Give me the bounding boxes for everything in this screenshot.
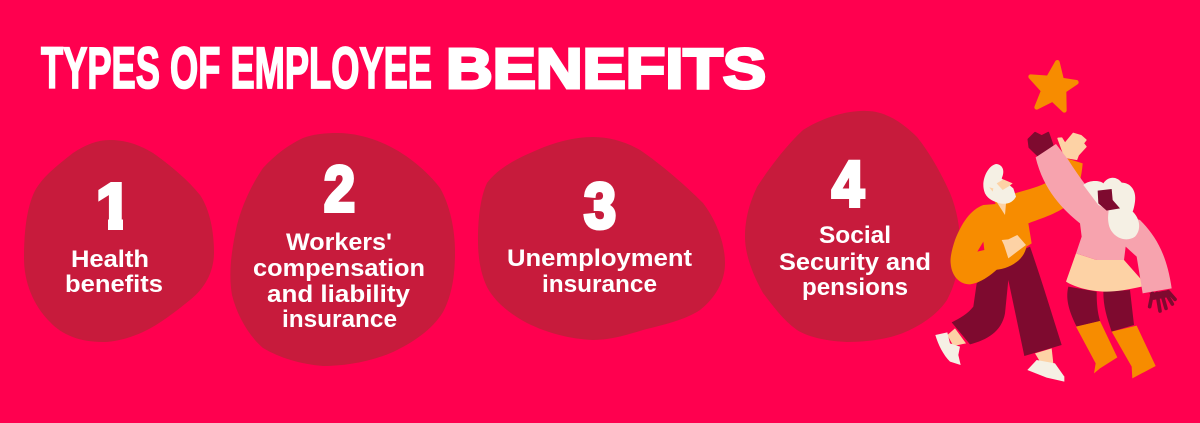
- illustration: two people reaching for a star: [935, 62, 1175, 382]
- panel: benefit 2: Workers': [286, 229, 392, 256]
- title: TYPES OF EMPLOYEE: [41, 36, 432, 101]
- panel: benefit 4: Security and: [779, 249, 931, 276]
- panel: benefit 4: 4: [832, 148, 864, 220]
- man figure: [935, 133, 1083, 382]
- panel: benefit 3: Unemployment: [507, 245, 692, 272]
- icon: star: [1031, 62, 1076, 110]
- panel: benefit 3: insurance: [542, 271, 657, 298]
- title: BENEFITS: [446, 37, 766, 101]
- panel: benefit 2: 2: [324, 153, 355, 225]
- woman figure: [1036, 133, 1175, 378]
- panel: benefit 2: compensation: [253, 255, 425, 282]
- panel: benefit 2: [230, 133, 455, 366]
- panel: benefit 1: Health: [71, 246, 149, 273]
- panel: benefit 4: Social: [819, 222, 891, 249]
- panel: benefit 1: benefits: [65, 271, 163, 298]
- panel: benefit 3: [478, 137, 725, 340]
- panel: benefit 2: insurance: [282, 306, 397, 333]
- panel: benefit 1: [24, 140, 214, 342]
- panel: benefit 2: and liability: [267, 281, 411, 308]
- panel: benefit 4: [745, 111, 960, 342]
- panel: benefit 4: pensions: [802, 274, 908, 301]
- panel: benefit 1: 1: [96, 170, 132, 242]
- panel: benefit 3: 3: [584, 170, 616, 242]
